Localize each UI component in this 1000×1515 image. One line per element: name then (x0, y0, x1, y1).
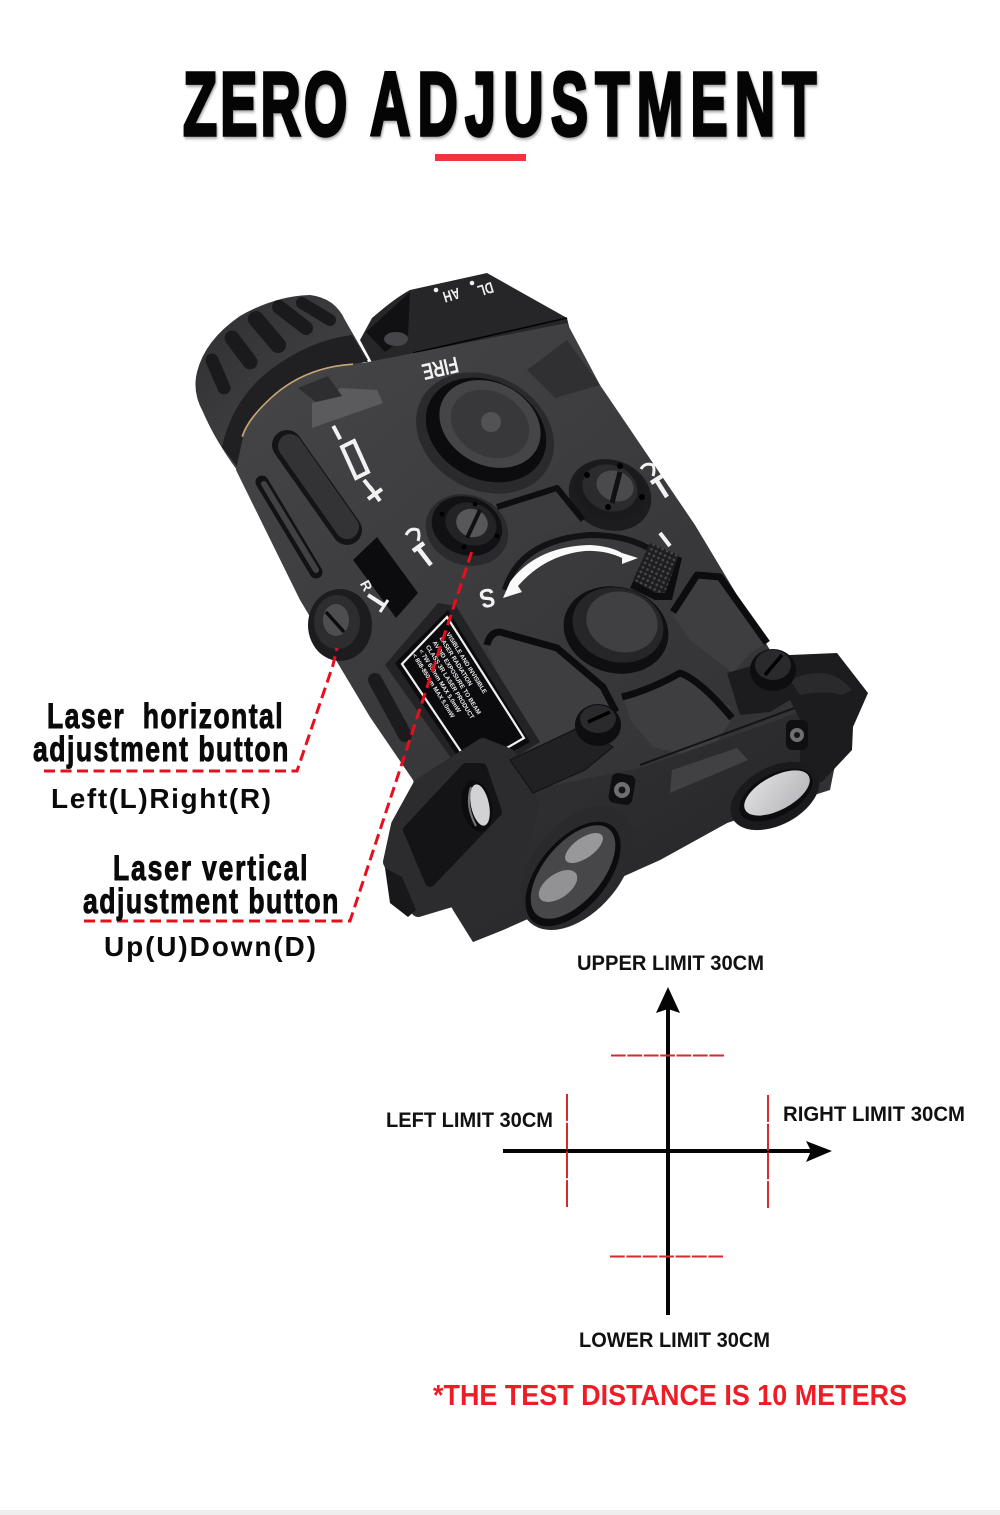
right lens (719, 748, 831, 844)
title: ADJUSTMENT (370, 53, 816, 154)
chart: limit crosshair (386, 952, 965, 1352)
top block: DL (476, 278, 495, 299)
title (183, 53, 817, 156)
S marking: S (477, 581, 498, 613)
callout: vertical leader line (84, 548, 473, 921)
top block (360, 273, 575, 368)
title underline (435, 154, 526, 161)
main body (236, 323, 840, 942)
callout text: vertical button: adjustment button (83, 881, 338, 921)
vertical axis with arrow (656, 987, 680, 1315)
lower limit label: LOWER LIMIT 30CM (579, 1329, 770, 1352)
title: ZERO (184, 55, 348, 156)
title: ZERO (183, 53, 347, 154)
FIRE button (395, 349, 575, 517)
upper limit label: UPPER LIMIT 30CM (577, 952, 764, 975)
selector arrow recess (505, 535, 648, 590)
FIRE label: FIRE (419, 351, 461, 384)
callout text: horizontal button: Left(L)Right(R) (51, 783, 271, 814)
selector lever (630, 543, 682, 600)
selector arrow (503, 545, 638, 598)
bottom strip (0, 1510, 1000, 1515)
callout: horizontal leader line (44, 648, 337, 771)
gold ring (243, 365, 353, 437)
warning label (385, 603, 540, 785)
horizontal adjustment dial (308, 589, 372, 661)
warning label: < 808-850nm MAX 5.0mW (410, 653, 456, 720)
callout text: horizontal button: Laser horizontal (47, 696, 283, 736)
title: ADJUSTMENT (371, 55, 817, 156)
callout text: horizontal button (33, 696, 288, 814)
test distance note: *THE TEST DISTANCE IS 10 METERS (433, 1380, 907, 1412)
front face (450, 692, 850, 942)
vertical adjustment dial (416, 483, 518, 577)
right limit line (767, 1095, 769, 1208)
left side slots (262, 445, 418, 735)
knob (195, 295, 368, 470)
left lens (497, 785, 657, 951)
left limit label: LEFT LIMIT 30CM (386, 1109, 553, 1132)
callout text: vertical button: Laser vertical (113, 848, 308, 888)
left limit line (566, 1094, 568, 1207)
upper limit line (611, 1054, 724, 1056)
warning label: AVOID EXPOSURE TO BEAM (431, 640, 482, 716)
warning label: LASER RADIATION (438, 636, 474, 688)
light chamfer marks on body (312, 388, 383, 428)
U arrow markings (406, 464, 670, 565)
callout text: vertical button (83, 848, 338, 962)
right limit label: RIGHT LIMIT 30CM (783, 1103, 965, 1126)
panel pockets (487, 488, 767, 765)
horizontal axis with arrow (503, 1141, 832, 1162)
left side slots: R (357, 577, 376, 594)
second dial (559, 448, 661, 542)
lower limit line (610, 1256, 723, 1258)
warning label: < 7W 650nm MAX 5.0mW (417, 648, 462, 714)
warning label: VISIBLE AND INVISIBLE (444, 631, 488, 695)
brightness marking (331, 425, 382, 501)
callout text: vertical button: Up(U)Down(D) (104, 931, 316, 962)
warning label: CLASS 3R LASER PRODUCT (424, 644, 475, 721)
left clasp and screw (510, 704, 636, 806)
round recess (554, 575, 678, 685)
right clasp and screw (727, 649, 868, 782)
callout text: horizontal button: adjustment button (33, 729, 288, 769)
product image: laser device (195, 273, 868, 951)
flip cap (385, 745, 532, 917)
top block: AH (441, 284, 462, 305)
